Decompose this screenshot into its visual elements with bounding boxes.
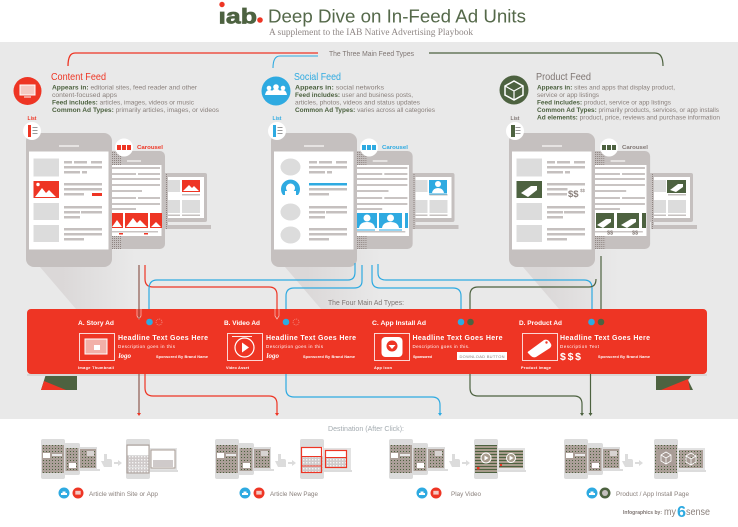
icon: monitor <box>14 77 42 105</box>
ad type c: app install ad <box>372 320 507 370</box>
ad type c: app install ad: C. App Install Ad <box>372 320 426 327</box>
label: list <box>506 116 524 140</box>
description: service or app listings <box>537 92 600 99</box>
devices: content feed <box>23 116 211 309</box>
prices: carousel: $$ <box>632 230 638 236</box>
subtitle: A supplement to the IAB Native Advertising Playbook <box>269 28 473 38</box>
panel: ad types band <box>27 309 707 374</box>
label: list: List <box>273 116 282 122</box>
heading: the three main feed types: The Three Main Feed Types <box>329 49 414 58</box>
ad type d: product ad: Description Text <box>560 344 600 349</box>
ad type b: video ad: Sponsored By Brand Name <box>303 355 355 359</box>
ad type b: video ad: Video Asset <box>226 366 250 370</box>
icon: people <box>262 76 290 106</box>
ad image: laptop <box>182 180 200 192</box>
devices: product feed <box>506 116 697 309</box>
icons <box>416 488 442 498</box>
description: Feed includes: product, service or app listings <box>537 100 672 106</box>
ad type c: app install ad: Sponsored <box>413 355 433 359</box>
description: Feed includes: user and business posts, <box>295 92 413 99</box>
heading: Content Feed <box>51 71 106 83</box>
connector dots <box>146 319 604 325</box>
ad type d: product ad: Product Image <box>521 366 551 370</box>
panel: product feed <box>500 71 720 122</box>
ribbon fold: right <box>656 374 693 390</box>
ad images: carousel <box>112 213 162 234</box>
download button: DOWNLOAD BUTTON <box>460 354 505 359</box>
ad type d: product ad: D. Product Ad <box>519 320 562 327</box>
label: carousel <box>600 138 649 156</box>
description: Common Ad Types: primarily products, services, or app installs <box>537 107 720 114</box>
heading: the four main ad types: The Four Main Ad Types: <box>328 298 404 307</box>
label: carousel: Carousel <box>382 145 409 151</box>
price: $$ <box>568 189 579 200</box>
ribbon fold: left <box>41 374 77 390</box>
ad images: carousel <box>596 213 646 228</box>
iab logo: iab <box>218 6 257 28</box>
icons <box>58 488 84 498</box>
destination 3: play video <box>389 439 526 498</box>
ad type a: story ad: Image Thumbnail <box>78 366 114 370</box>
ad type d: product ad: Sponsored By Brand Name <box>598 355 650 359</box>
panel: social feed <box>262 71 436 114</box>
credit: infographics by my6sense: my <box>664 507 676 518</box>
ad type b: video ad: B. Video Ad <box>224 320 260 327</box>
label: Product / App Install Page <box>616 491 689 498</box>
iab logo <box>218 2 263 29</box>
description: Ad elements: product, price, reviews and purchase information <box>537 114 720 122</box>
arrow: social feed connector <box>273 56 318 68</box>
ad type a: story ad <box>78 320 208 370</box>
arrow: product feed connector <box>429 53 663 66</box>
ad image: list <box>281 180 300 196</box>
destination 2: article new page <box>215 439 352 498</box>
destination 4: product / app install page <box>564 439 706 498</box>
title <box>218 2 526 29</box>
label: Article New Page <box>270 491 318 498</box>
label: list: List <box>511 116 520 122</box>
ad type d: product ad: $$$ <box>560 351 581 363</box>
arrow: content feed connector <box>68 53 318 66</box>
ad type a: story ad: A. Story Ad <box>78 320 114 327</box>
price: $$ <box>580 188 586 193</box>
arrowheads into band <box>137 309 279 319</box>
ad type a: story ad: Headline Text Goes Here <box>118 335 208 342</box>
label: list <box>268 116 286 140</box>
ad type b: video ad: logo <box>266 352 279 360</box>
label: Article within Site or App <box>89 491 158 498</box>
label: list: List <box>28 116 37 122</box>
ad type a: story ad: logo <box>118 352 131 360</box>
label: list <box>23 116 41 140</box>
description <box>537 84 720 122</box>
description: Appears in: social networks <box>295 84 385 92</box>
label: carousel: Carousel <box>137 145 164 151</box>
ad type c: app install ad: App Icon <box>374 366 393 370</box>
ad type c: app install ad: Headline Text Goes Here <box>412 335 503 342</box>
label: Play Video <box>451 491 481 498</box>
label: carousel <box>360 138 409 156</box>
destination 1: article within site or app <box>41 439 178 498</box>
description: content-focused apps <box>52 92 118 99</box>
devices: social feed <box>268 116 458 309</box>
ad type d: product ad <box>519 320 650 370</box>
ad image: laptop <box>667 180 686 193</box>
label: carousel: Carousel <box>622 145 649 151</box>
connectors: ad types to destinations <box>139 374 590 415</box>
icons <box>586 488 610 498</box>
description <box>52 84 220 114</box>
description: Appears in: sites and apps that display product, <box>537 84 675 92</box>
description: Feed includes: articles, images, videos or music <box>52 100 195 106</box>
ad image: list <box>516 181 542 198</box>
heading: Product Feed <box>536 71 591 83</box>
ad type b: video ad: Headline Text Goes Here <box>266 335 356 342</box>
ad image: list <box>34 181 59 198</box>
credit: infographics by my6sense: sense <box>686 507 710 518</box>
arrowheads into destination <box>137 413 592 416</box>
description: Common Ad Types: primarily articles, images, or videos <box>52 107 220 114</box>
ad type c: app install ad: Description goes in this. <box>412 344 470 349</box>
ad type b: video ad: Description goes in this <box>266 344 324 349</box>
panel: content feed <box>14 71 220 114</box>
ad type a: story ad: Description goes in this <box>118 344 176 349</box>
icon: box <box>500 76 528 104</box>
credit: infographics by my6sense: Infographics by: <box>623 510 662 516</box>
description: Common Ad Types: varies across all categories <box>295 107 436 114</box>
price <box>568 188 586 200</box>
ad type a: story ad: Sponsored By Brand Name <box>156 355 208 359</box>
description <box>295 84 436 114</box>
background panel <box>0 42 738 419</box>
ad type d: product ad: Headline Text Goes Here <box>560 335 650 342</box>
ad type b: video ad <box>224 320 356 370</box>
heading: Deep Dive on In-Feed Ad Units <box>268 6 526 26</box>
prices: carousel <box>607 230 638 236</box>
credit: infographics by my6sense: 6 <box>677 504 686 521</box>
description: Appears in: editorial sites, feed reader and other <box>52 84 198 92</box>
ad image: laptop <box>429 180 447 194</box>
heading: Social Feed <box>294 71 341 83</box>
icons <box>240 488 264 498</box>
heading: destination: Destination (After Click): <box>328 424 404 433</box>
prices: carousel: $$ <box>607 230 613 236</box>
connectors: feeds to ad types <box>139 256 601 319</box>
credit: infographics by my6sense <box>623 504 710 521</box>
label: carousel <box>115 138 164 156</box>
ad images: carousel <box>357 213 408 230</box>
description: articles, photos, videos and status updates <box>295 100 421 106</box>
